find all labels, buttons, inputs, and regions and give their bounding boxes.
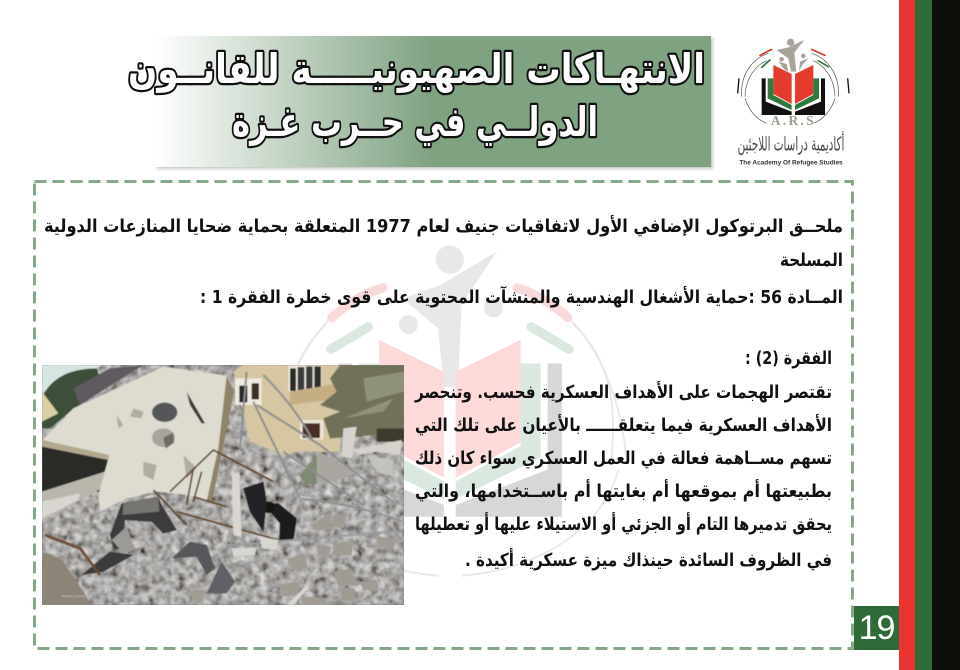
man searching rubble: [270, 502, 298, 540]
paragraph heading: الفقرة (2) :: [745, 348, 832, 369]
logo figures: [777, 39, 808, 72]
main text block: [44, 214, 843, 308]
logo: [737, 38, 850, 166]
sky and trees: [42, 365, 103, 392]
title: الدولــي في حــرب غـزة: [232, 98, 598, 147]
light pipe: [227, 531, 400, 546]
page number: [854, 606, 899, 650]
cave under wall: [42, 445, 110, 492]
page number: 19: [859, 609, 894, 647]
article 56 line: المــادة 56 :حماية الأشغال الهندسية والمنشآت المحتوية على قوى خطرة الفقرة 1 :: [200, 285, 843, 308]
cracked white wall: [43, 367, 233, 512]
logo english name: The Academy Of Refugee Studies: [739, 160, 843, 166]
photo: destroyed building: [42, 365, 404, 605]
paragraph 2 block: [414, 348, 832, 571]
palm: [320, 365, 404, 438]
dark sheets: [110, 497, 177, 552]
logo initials: A.R.S: [771, 113, 816, 128]
rubble blocks: [192, 512, 397, 605]
metal frame: [240, 372, 397, 505]
title banner: [155, 36, 711, 167]
logo book: [762, 65, 825, 115]
watermark logo: [297, 246, 626, 577]
right concrete slabs: [352, 440, 402, 455]
logo colour accents: [760, 49, 828, 67]
photo credit: WWW.SAMAA.TV | WWW.SAMAAIMAGES.COM: [62, 595, 142, 599]
logo arcs: [738, 53, 849, 123]
title: [128, 45, 705, 148]
protocol heading line 2: المسلحة: [780, 250, 843, 271]
standing pillar: [232, 472, 242, 538]
side stripes: [899, 0, 960, 670]
beige building: [233, 365, 340, 455]
foreground rock: [42, 552, 92, 605]
